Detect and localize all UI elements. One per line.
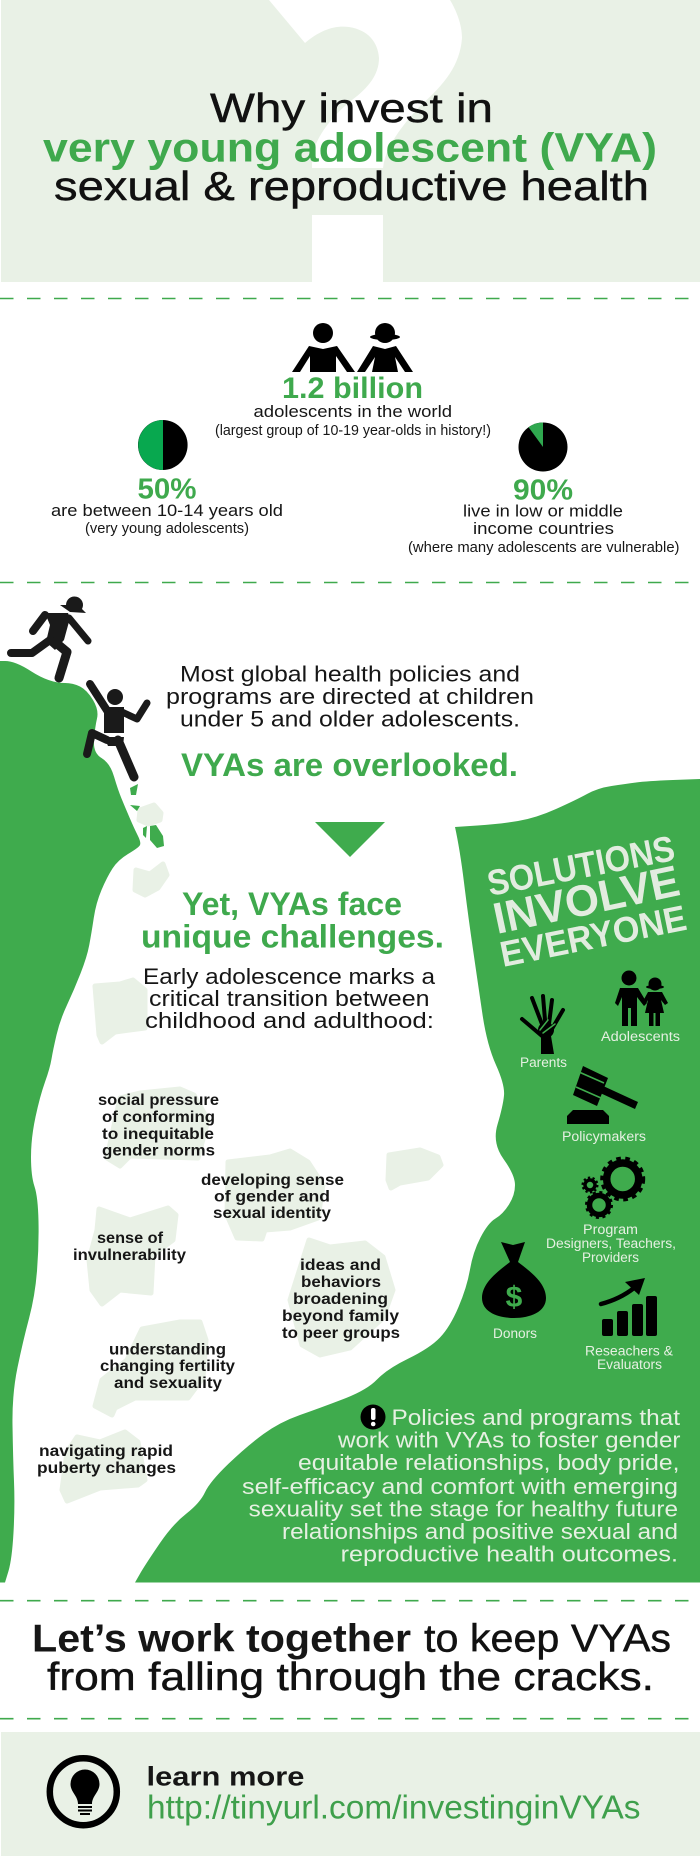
text block: early adolescence: critical transition between [149, 986, 430, 1011]
text block: challenge labels: sexual identity [213, 1205, 331, 1222]
label: Policymakers: Policymakers [562, 1129, 646, 1144]
text block: policy statement [166, 662, 534, 732]
label: Researchers and Evaluators: Evaluators [597, 1357, 662, 1372]
text block: policies and programs [242, 1405, 680, 1566]
stat: 1.2 billion: 1.2 billion [282, 372, 423, 405]
label: Researchers and Evaluators [585, 1344, 673, 1372]
icon: money bag [482, 1242, 546, 1318]
text block: challenge labels: understanding [109, 1342, 226, 1358]
text block: call to action: Let’s work together [32, 1618, 411, 1660]
label: Adolescents: Adolescents [601, 1029, 680, 1044]
text block: policy statement: Most global health policies and [180, 662, 520, 686]
text block: call to action [32, 1618, 671, 1699]
panel: header background with question mark [1, 0, 700, 282]
stat: 90 percent [408, 474, 680, 556]
stat: 90 percent: (where many adolescents are vulnerable) [408, 540, 680, 556]
label: Parents: Parents [520, 1055, 567, 1070]
title: sexual & reproductive health [54, 163, 649, 209]
text block: challenge labels: broadening [293, 1291, 388, 1308]
label: Program Designers, Teachers, Providers: Program [583, 1222, 638, 1237]
heading: unique challenges: unique challenges. [141, 918, 444, 954]
icon: two adolescents [292, 323, 413, 372]
text block: challenge labels: and sexuality [114, 1375, 222, 1392]
text block: challenge labels: of gender and [214, 1188, 330, 1206]
text block: policies and programs: equitable relationships, body pride, [298, 1450, 680, 1475]
text block: challenge labels: ideas and [300, 1257, 381, 1274]
text block: challenge labels: sense of [97, 1230, 164, 1247]
stat: 50 percent [51, 474, 283, 537]
label: Program Designers, Teachers, Providers: Designers, Teachers, [546, 1236, 676, 1251]
stat: 1.2 billion: adolescents in the world [254, 402, 452, 421]
text block: call to action: to keep VYAs [424, 1618, 671, 1660]
text block: policies and programs: self-efficacy and comfort with emerging [242, 1474, 678, 1499]
panel: left cliff [0, 661, 164, 1582]
heading: VYAs are overlooked: VYAs are overlooked. [181, 747, 518, 783]
text block: policies and programs: Policies and programs that [392, 1405, 680, 1430]
text block: challenge labels: to inequitable [102, 1126, 214, 1143]
label: Program Designers, Teachers, Providers [546, 1222, 676, 1265]
text block: challenge labels: behaviors [301, 1274, 381, 1291]
icon: gears [582, 1158, 643, 1218]
text block: challenge labels [37, 1092, 400, 1477]
stat: 50 percent: are between 10-14 years old [51, 501, 283, 520]
icon: climbing figure [87, 684, 147, 777]
stat: 1.2 billion [215, 372, 491, 439]
icon: parents hands [522, 996, 563, 1054]
heading: solutions involve everyone: INVOLVE [489, 857, 684, 944]
text block: policies and programs: work with VYAs to foster gender [337, 1428, 680, 1452]
label: Program Designers, Teachers, Providers: Providers [582, 1250, 639, 1265]
stat: 90 percent: live in low or middle [463, 502, 623, 520]
pie chart: 50 percent [138, 420, 188, 470]
label: Donors: Donors [493, 1326, 537, 1341]
text block: policies and programs: relationships and positive sexual and [282, 1519, 678, 1544]
icon: running figure [11, 596, 88, 678]
green fragments [130, 784, 164, 848]
icon: money bag: $ [506, 1281, 523, 1314]
stat: 1.2 billion: (largest group of 10-19 year-olds in history!) [215, 423, 491, 439]
icon: adolescents holding hands [615, 970, 668, 1026]
text block: challenge labels: to peer groups [282, 1325, 400, 1342]
title: very young adolescent (VYA) [43, 124, 657, 170]
heading: unique challenges: Yet, VYAs face [182, 886, 402, 922]
stat: 90 percent: 90% [513, 474, 573, 506]
text block: challenge labels: navigating rapid [39, 1443, 173, 1460]
arrow: downward triangle [315, 822, 385, 857]
heading: unique challenges [141, 886, 444, 954]
stat: 50 percent: 50% [138, 474, 197, 506]
text block: challenge labels: beyond family [282, 1308, 399, 1325]
heading: solutions involve everyone [484, 827, 690, 975]
text block: early adolescence: childhood and adulthood: [145, 1008, 434, 1033]
text block: challenge labels: social pressure [98, 1092, 219, 1109]
pie chart: 90 percent [518, 422, 568, 472]
icon: gavel [567, 1066, 638, 1124]
text: link: http://tinyurl.com/investinginVYAs [147, 1788, 640, 1826]
text block: policies and programs: reproductive health outcomes. [341, 1542, 678, 1566]
text block: challenge labels: of conforming [102, 1109, 215, 1126]
text block: challenge labels: invulnerability [73, 1247, 186, 1264]
panel: footer [1, 1732, 700, 1856]
text: learn more: learn more [146, 1762, 304, 1792]
icon: light bulb [50, 1758, 117, 1825]
panel: solutions [135, 779, 700, 1582]
title [43, 85, 657, 209]
text block: policy statement: under 5 and older adolescents. [180, 706, 520, 732]
text block: challenge labels: gender norms [102, 1142, 215, 1160]
heading: solutions involve everyone: EVERYONE [496, 897, 690, 975]
label: Researchers and Evaluators: Reseachers & [585, 1344, 673, 1358]
icon: rising bar chart with arrow [601, 1278, 657, 1336]
panel: key statistics [51, 323, 680, 556]
heading: solutions involve everyone: SOLUTIONS [484, 827, 678, 904]
stat: 50 percent: (very young adolescents) [85, 521, 249, 537]
text block: early adolescence: Early adolescence marks a [143, 964, 436, 989]
stat: 90 percent: income countries [473, 519, 614, 538]
text block: call to action: from falling through the cracks. [47, 1656, 654, 1699]
text block: policies and programs: sexuality set the stage for healthy future [249, 1496, 678, 1522]
title: Why invest in [210, 85, 493, 131]
icon: exclamation mark [360, 1404, 386, 1430]
text block: policy statement: programs are directed at children [166, 684, 534, 709]
text block: challenge labels: changing fertility [100, 1358, 235, 1375]
text block: early adolescence [143, 964, 436, 1033]
text block: challenge labels: puberty changes [37, 1460, 176, 1477]
text block: challenge labels: developing sense [201, 1172, 344, 1189]
panel: pale falling cliff fragments [62, 805, 441, 1501]
